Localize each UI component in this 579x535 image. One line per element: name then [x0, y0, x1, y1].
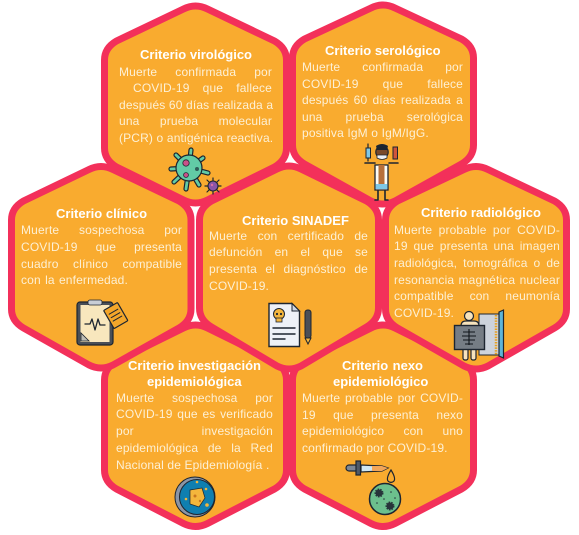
panel: criterio serológico: una prueba serológica — [302, 110, 463, 124]
panel: criterio serológico: COVID-19 que fallece — [302, 77, 463, 91]
title: Criterio clínico — [56, 206, 147, 221]
panel: criterio virológico: después 60 días realizada a — [119, 98, 273, 112]
body text: Muerte con certificado de — [209, 229, 368, 243]
title: Criterio SINADEF — [242, 213, 349, 228]
title: Criterio serológico — [325, 43, 441, 58]
body text: Muerte sospechosa por — [116, 391, 273, 405]
panel: criterio SINADEF: presenta el diagnóstico de — [209, 262, 368, 276]
panel: criterio clínico: COVID-19 que presenta — [21, 240, 182, 254]
panel: criterio investigación epidemiológica: COVID-19 que es verificado — [116, 407, 273, 421]
panel: criterio radiológico: compatible con neumonía — [394, 289, 560, 303]
panel: criterio virológico: una prueba molecular — [119, 114, 272, 128]
panel: criterio nexo epidemiológico: 19 que presenta nexo — [302, 408, 463, 422]
panel: criterio nexo epidemiológico: epidemiológico con uno — [302, 424, 463, 438]
panel: criterio virológico — [101, 2, 290, 206]
body text: Muerte probable por COVID- — [302, 391, 463, 405]
panel: criterio investigación epidemiológica: epidemiológica de la Red — [116, 441, 273, 455]
panel: criterio clínico: cuadro clínico compatible — [21, 257, 182, 271]
body text: Muerte confirmada por — [119, 65, 272, 79]
panel: criterio nexo epidemiológico: confirmado por COVID-19. — [302, 441, 448, 455]
panel: criterio virológico: (PCR) o antigénica reactiva. — [119, 131, 273, 145]
panel: criterio investigación epidemiológica: por investigación — [116, 424, 273, 438]
panel: criterio investigación epidemiológica: epidemiológica — [147, 374, 242, 389]
body text: Muerte confirmada por — [302, 60, 463, 74]
panel: criterio clínico: con la enfermedad. — [21, 273, 128, 287]
panel: criterio nexo epidemiológico: epidemiológico — [333, 374, 428, 389]
hexagon and icon: virus — [101, 2, 290, 206]
body text: Muerte sospechosa por — [21, 223, 182, 237]
title: Criterio radiológico — [421, 205, 541, 220]
panel: criterio radiológico — [382, 163, 570, 372]
panel: criterio SINADEF — [196, 162, 382, 372]
title: Criterio virológico — [140, 47, 252, 62]
hexagon and icon: gotero y placa — [290, 322, 477, 530]
hexagon and icon: científico — [289, 2, 477, 208]
hexagon and icon: historia clínica — [8, 163, 194, 372]
panel: criterio investigación epidemiológica: Nacional de Epidemiología . — [116, 458, 269, 472]
panel: criterio radiológico: resonancia magnética nuclear — [394, 273, 560, 287]
panel: criterio investigación epidemiológica — [101, 322, 290, 530]
panel: criterio serológico: positiva IgM o IgM/IgG. — [302, 126, 429, 140]
hexagon and icon: certificado de defunción — [196, 162, 382, 372]
panel: criterio serológico — [289, 2, 477, 208]
title: Criterio investigación — [128, 358, 261, 373]
panel: criterio SINADEF: COVID-19. — [209, 279, 269, 293]
panel: criterio virológico: COVID-19 que fallece — [133, 81, 272, 95]
panel: criterio SINADEF: defunción en el que se — [209, 245, 368, 259]
panel: criterio radiológico: 19 que presenta una imagen — [394, 239, 560, 253]
hexagon and icon: investigación — [101, 322, 290, 530]
hexagon and icon: radiografía — [382, 163, 570, 372]
panel: criterio serológico: después 60 días realizada a — [302, 93, 463, 107]
title: Criterio nexo — [342, 358, 423, 373]
panel: criterio radiológico: COVID-19. — [394, 306, 454, 320]
body text: Muerte probable por COVID- — [394, 223, 560, 237]
panel: criterio clínico — [8, 163, 194, 372]
panel: criterio radiológico: radiológica, tomográfica o de — [394, 256, 560, 270]
panel: criterio nexo epidemiológico — [290, 322, 477, 530]
